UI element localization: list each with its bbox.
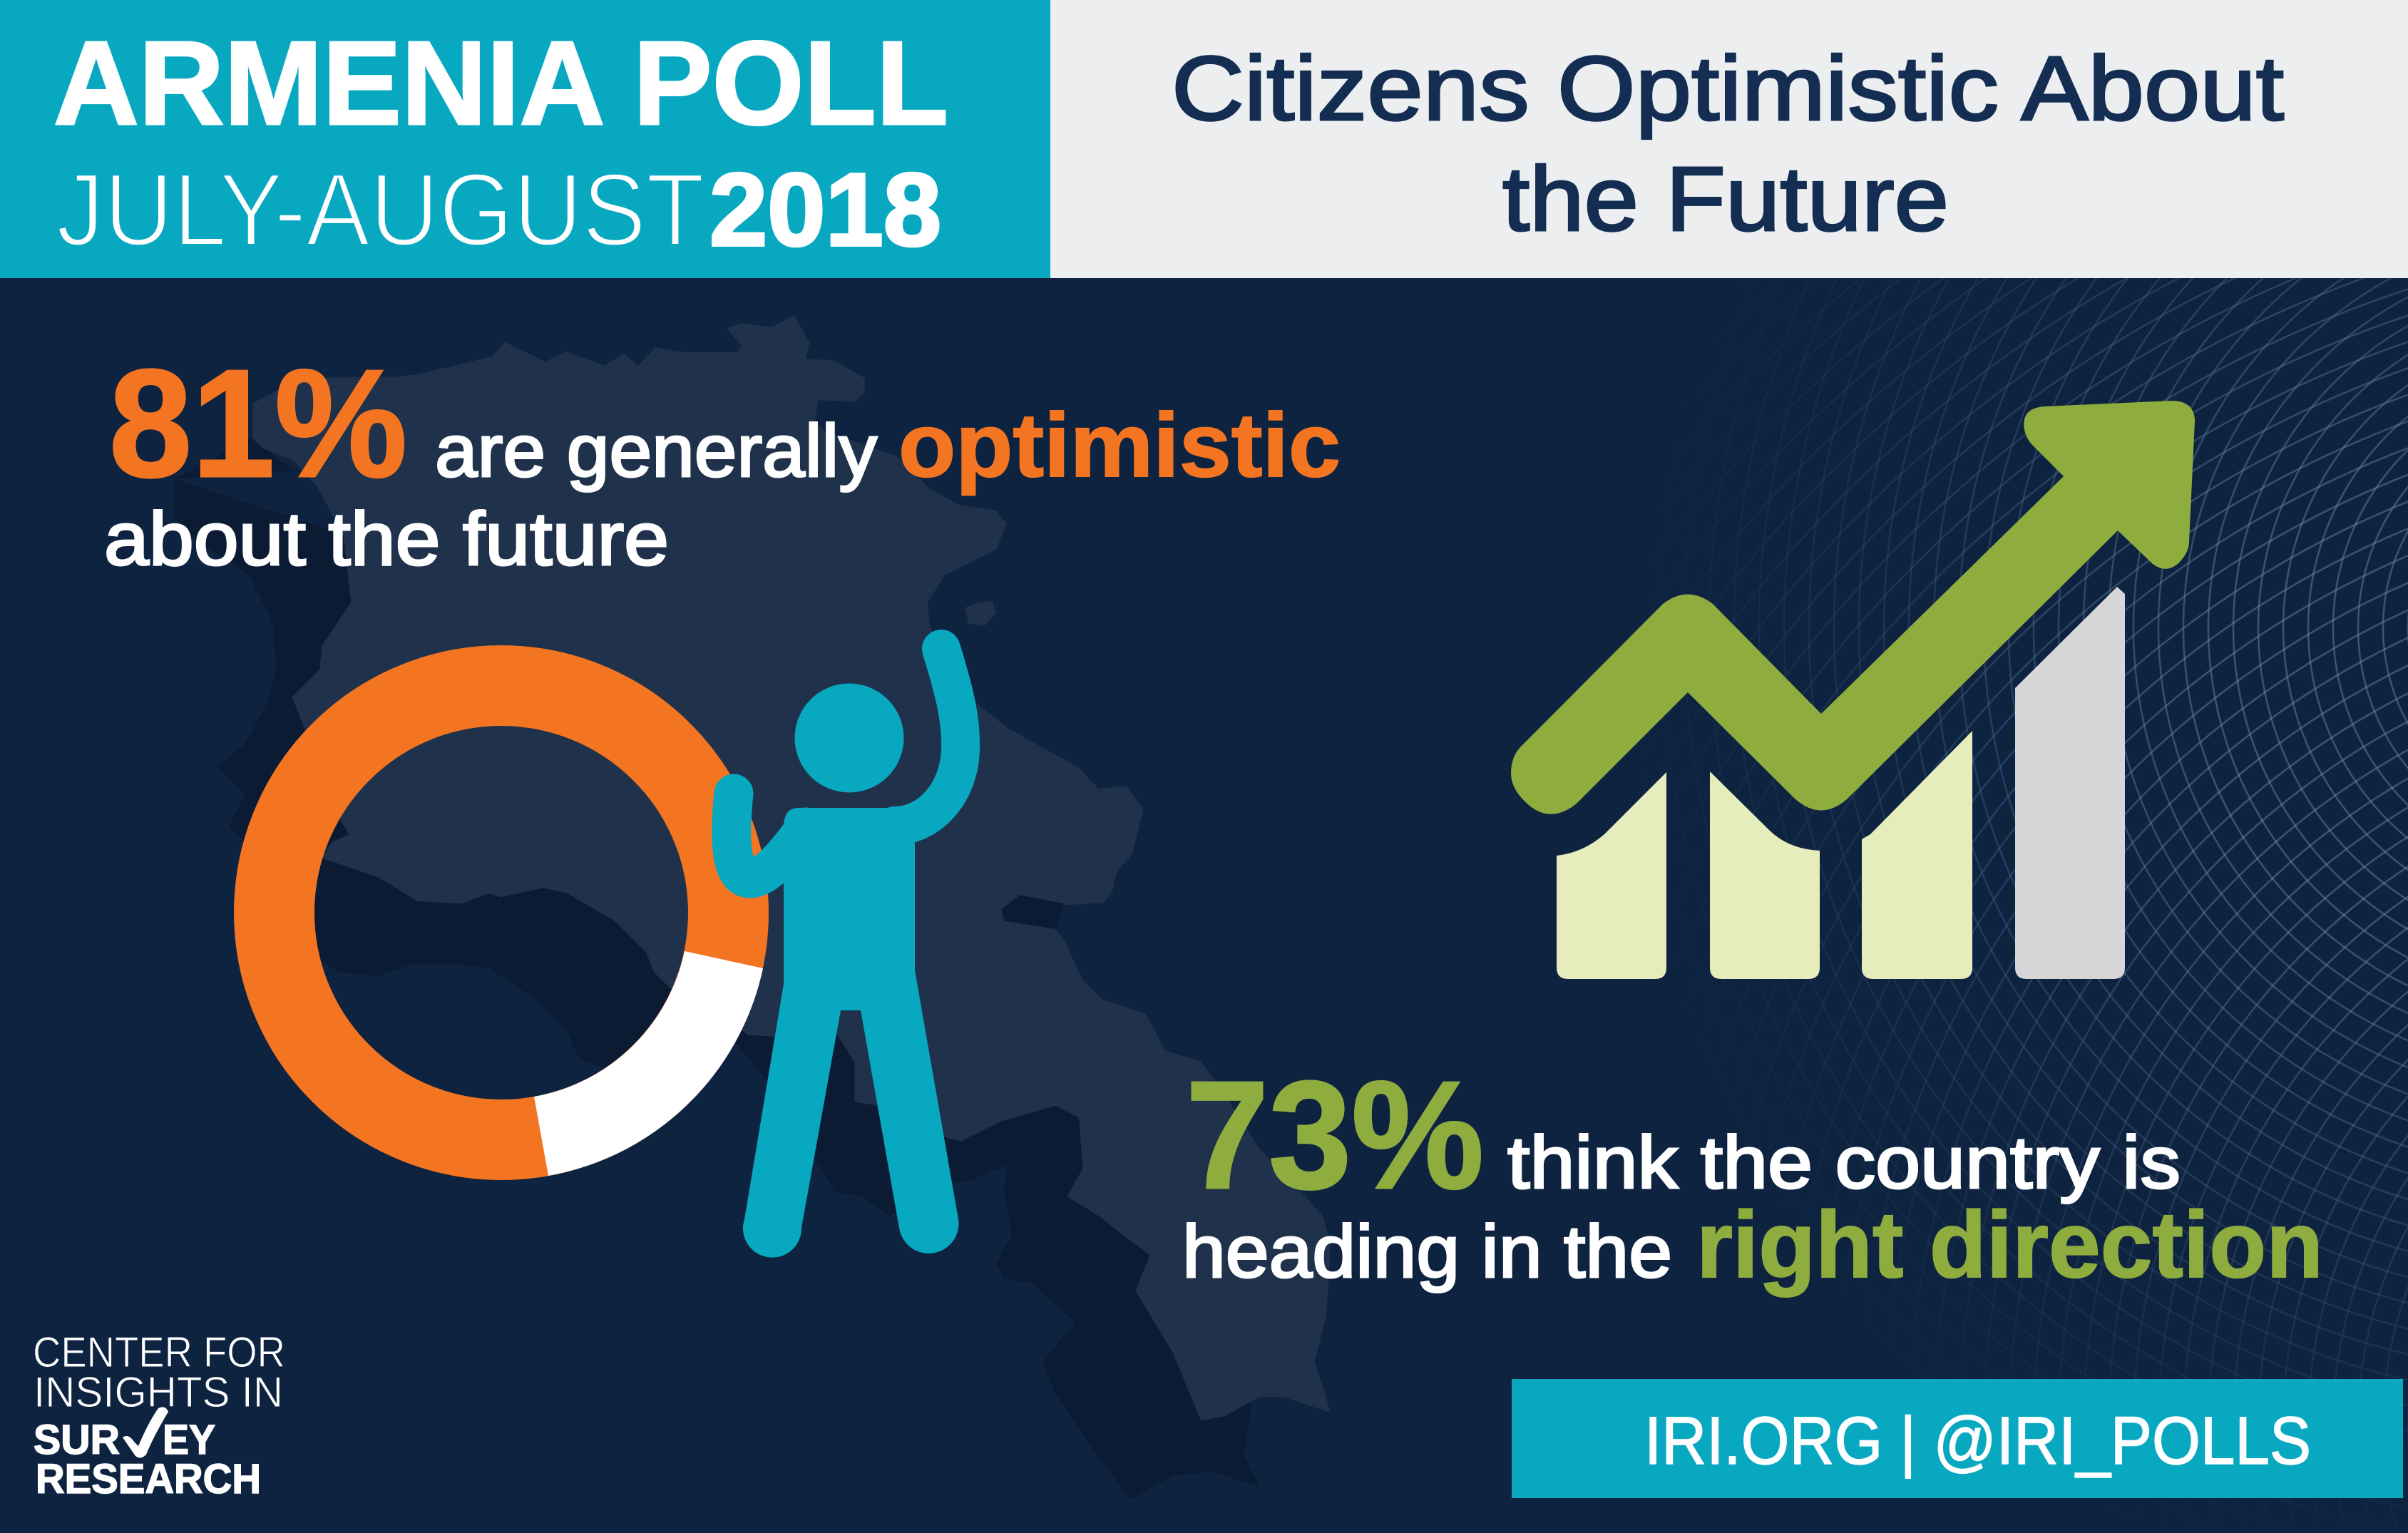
logo: Center for Insights in Survey Research: RESEARCH: [36, 1456, 261, 1502]
stat: 81% optimistic: optimistic: [898, 394, 1341, 496]
heading: Citizens Optimistic About the Future: [1172, 38, 2284, 250]
stat: 73% right direction: think the country is: [1507, 1122, 2181, 1204]
stat: 73% right direction: heading in the: [1182, 1211, 1672, 1293]
stat: 81% optimistic: [104, 337, 1341, 581]
stat: 81% optimistic: 81%: [109, 337, 407, 509]
icon: person with raised arm: [732, 649, 960, 1258]
heading: Citizens Optimistic About the Future: the Future: [1502, 148, 1949, 250]
header band: teal: [0, 0, 1050, 278]
donut chart: 81 percent: [274, 686, 763, 1176]
chart: rising bars: [1557, 587, 2125, 979]
stat: 73% right direction: [1182, 1049, 2323, 1297]
stat: 81% optimistic: about the future: [104, 497, 669, 581]
subtitle: date: JULY-AUGUST: [56, 152, 705, 267]
subtitle: date: 2018: [709, 152, 941, 267]
stat: 73% right direction: 73%: [1186, 1049, 1484, 1221]
banner: website and handle: [1512, 1379, 2403, 1498]
logo: Center for Insights in Survey Research: SUR: [34, 1417, 120, 1463]
header band: gray: [1050, 0, 2408, 278]
stat: 73% right direction: right direction: [1696, 1192, 2323, 1297]
banner: website and handle: IRI.ORG | @IRI_POLLS: [1644, 1403, 2311, 1479]
arrow: rising trend: [1511, 401, 2195, 814]
logo: Center for Insights in Survey Research: [33, 1328, 285, 1502]
logo: Center for Insights in Survey Research: INSIGHTS IN: [34, 1368, 283, 1416]
logo: Center for Insights in Survey Research: CENTER FOR: [33, 1328, 285, 1376]
heading: Citizens Optimistic About the Future: Citizens Optimistic About: [1172, 38, 2284, 140]
stat: 81% optimistic: are generally: [435, 410, 877, 493]
title: Armenia Poll: ARMENIA POLL: [53, 17, 948, 150]
map of Armenia: [174, 315, 1331, 1499]
logo: Center for Insights in Survey Research: EY: [163, 1417, 215, 1463]
